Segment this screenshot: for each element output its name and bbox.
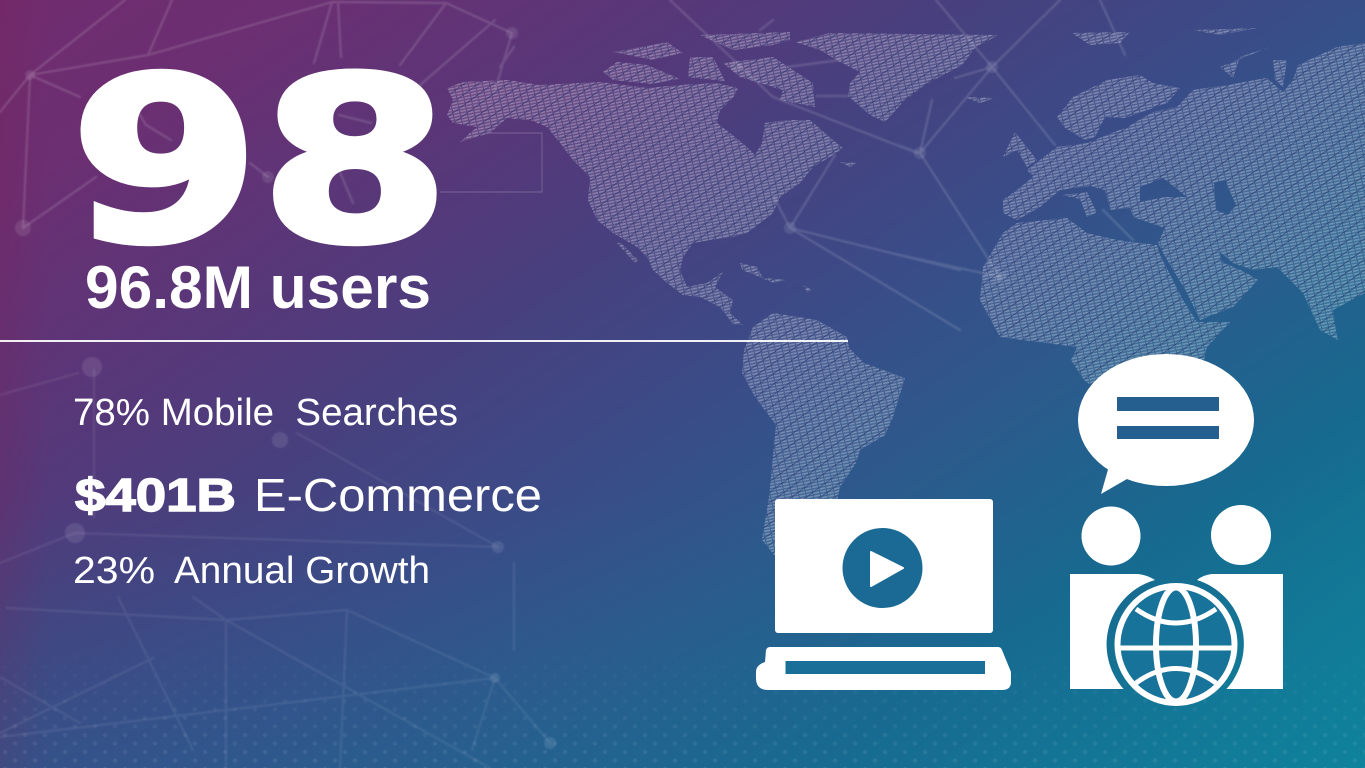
hatched world map — [440, 20, 1365, 580]
stat: annual growth: Annual Growth — [174, 550, 430, 592]
users subtitle: 96.8M users — [85, 254, 431, 321]
icon: speech bubble — [1078, 354, 1254, 494]
stat: mobile searches: 78% Mobile Searches — [73, 392, 458, 434]
thin rectangular connector line — [440, 133, 542, 192]
big number 98: 98 — [70, 29, 450, 294]
globe — [1118, 586, 1234, 703]
halftone dot field — [3, 699, 1365, 768]
icon: two people with globe — [1070, 505, 1283, 703]
icon: laptop with play button — [756, 499, 1011, 690]
divider rule — [0, 340, 848, 342]
stat: e-commerce: $401B — [75, 469, 236, 521]
network nodes — [15, 27, 1006, 749]
stat: e-commerce: E-Commerce — [254, 469, 542, 521]
stat: annual growth: 23% — [73, 550, 155, 592]
stat: e-commerce — [75, 469, 542, 521]
